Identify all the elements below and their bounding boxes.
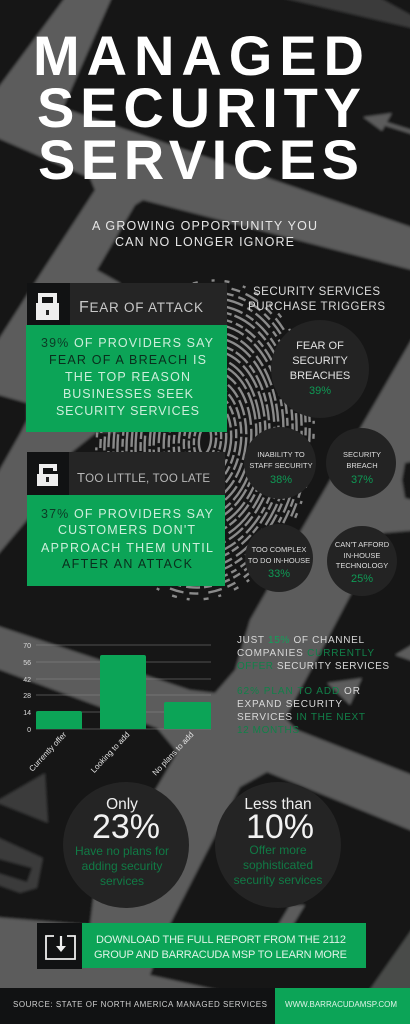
bar chart: 56 <box>23 660 31 667</box>
bar chart: Looking to add <box>89 730 131 775</box>
panel: fear of attack: BUSINESSES SEEK <box>63 387 194 401</box>
footer <box>0 988 410 1024</box>
footer: SOURCE: STATE OF NORTH AMERICA MANAGED SERVICES <box>13 1000 267 1009</box>
footer: WWW.BARRACUDAMSP.COM <box>285 1000 397 1009</box>
stat circle: 10%: Offer more <box>249 843 307 857</box>
text: channel companies stat: OFFER SECURITY SERVICES <box>237 661 389 672</box>
trigger: security breach: BREACH <box>346 461 378 470</box>
bar chart: No plans to add <box>151 730 195 777</box>
bar chart: 28 <box>23 693 31 700</box>
stat circle: 23%: adding security <box>82 859 162 873</box>
icon: open padlock <box>37 466 58 486</box>
subtitle: A GROWING OPPORTUNITY YOU <box>92 219 317 233</box>
title: MANAGED <box>33 24 364 87</box>
panel: too little, too late: CUSTOMERS DON'T <box>58 523 195 537</box>
text: channel companies stat <box>237 635 389 672</box>
title <box>33 24 364 191</box>
trigger: can't afford: IN-HOUSE <box>344 551 380 560</box>
panel: too little, too late <box>27 452 225 586</box>
trigger: can't afford: TECHNOLOGY <box>336 561 388 570</box>
trigger: fear of security breaches: FEAR OF <box>296 340 344 352</box>
stat circle: 23%: services <box>100 874 144 888</box>
title: SERVICES <box>38 128 359 191</box>
panel: too little, too late: 37% OF PROVIDERS SAY <box>41 507 214 521</box>
trigger: fear of security breaches: SECURITY <box>292 355 348 367</box>
trigger: inability to staff security: STAFF SECURITY <box>249 461 313 470</box>
heading: purchase triggers: SECURITY SERVICES <box>253 286 380 298</box>
text: plan to add stat: 12 MONTHS <box>237 725 299 736</box>
subtitle: CAN NO LONGER IGNORE <box>115 235 294 249</box>
trigger: inability to staff security: 38% <box>270 474 292 486</box>
icon: download <box>46 936 75 959</box>
trigger: can't afford: CAN'T AFFORD <box>335 540 390 549</box>
trigger: fear of security breaches <box>271 320 369 418</box>
panel: too little, too late: TOO LITTLE, TOO LATE <box>77 470 210 485</box>
trigger: too complex: 33% <box>268 568 290 580</box>
panel: fear of attack <box>26 283 227 432</box>
bar chart <box>23 643 211 777</box>
panel: fear of attack: SECURITY SERVICES <box>56 404 199 418</box>
title: SECURITY <box>37 76 361 139</box>
stat circle: 23%: Have no plans for <box>75 844 169 858</box>
stat circle: 23%: Only <box>106 796 138 813</box>
text: plan to add stat: SERVICES IN THE NEXT <box>237 712 365 723</box>
text: channel companies stat: COMPANIES CURRENTLY <box>237 648 374 659</box>
heading: purchase triggers <box>248 286 385 313</box>
stat circle: 10%: security services <box>234 873 322 887</box>
bar chart: 14 <box>23 710 31 717</box>
trigger: can't afford <box>327 526 397 596</box>
text: plan to add stat: 62% PLAN TO ADD OR <box>237 686 360 697</box>
trigger: too complex: TO DO IN-HOUSE <box>248 556 310 565</box>
stat circle: 23% <box>63 782 189 908</box>
trigger: security breach <box>326 428 396 498</box>
panel: fear of attack: FEAR OF ATTACK <box>79 299 203 316</box>
stat circle: 10% <box>215 782 341 908</box>
panel: too little, too late: APPROACH THEM UNTIL <box>41 541 213 555</box>
text: channel companies stat: JUST 15% OF CHANNEL <box>237 635 364 646</box>
panel: too little, too late: AFTER AN ATTACK <box>62 557 193 571</box>
trigger: too complex: TOO COMPLEX <box>252 545 306 554</box>
panel: fear of attack: FEAR OF A BREACH IS <box>49 353 206 367</box>
panel: fear of attack: 39% OF PROVIDERS SAY <box>41 336 214 350</box>
trigger: fear of security breaches: BREACHES <box>290 370 350 382</box>
stat circle: 23%: 23% <box>92 808 160 846</box>
fingerprint <box>81 270 329 610</box>
text: plan to add stat: EXPAND SECURITY <box>237 699 342 710</box>
bar chart: 42 <box>23 677 31 684</box>
trigger: inability to staff security: INABILITY TO <box>257 450 305 459</box>
call to action <box>37 923 366 969</box>
call to action: GROUP AND BARRACUDA MSP TO LEARN MORE <box>94 949 347 961</box>
trigger: security breach: 37% <box>351 474 373 486</box>
trigger: security breach: SECURITY <box>343 450 381 459</box>
panel: fear of attack: THE TOP REASON <box>65 370 190 384</box>
icon: closed padlock <box>36 295 59 320</box>
call to action: DOWNLOAD THE FULL REPORT FROM THE 2112 <box>96 934 346 946</box>
bar chart: 0 <box>27 727 31 734</box>
stat circle: 10%: Less than <box>244 796 312 813</box>
trigger: can't afford: 25% <box>351 573 373 585</box>
trigger: too complex <box>245 524 313 592</box>
heading: purchase triggers: PURCHASE TRIGGERS <box>248 301 385 313</box>
trigger: inability to staff security <box>244 427 316 499</box>
bar chart: 70 <box>23 643 31 650</box>
trigger: fear of security breaches: 39% <box>309 385 331 397</box>
subtitle <box>92 219 317 249</box>
stat circle: 10%: 10% <box>246 808 314 846</box>
stat circle: 10%: sophisticated <box>243 858 313 872</box>
text: plan to add stat <box>237 686 365 736</box>
bar chart: Currently offer <box>27 730 69 773</box>
